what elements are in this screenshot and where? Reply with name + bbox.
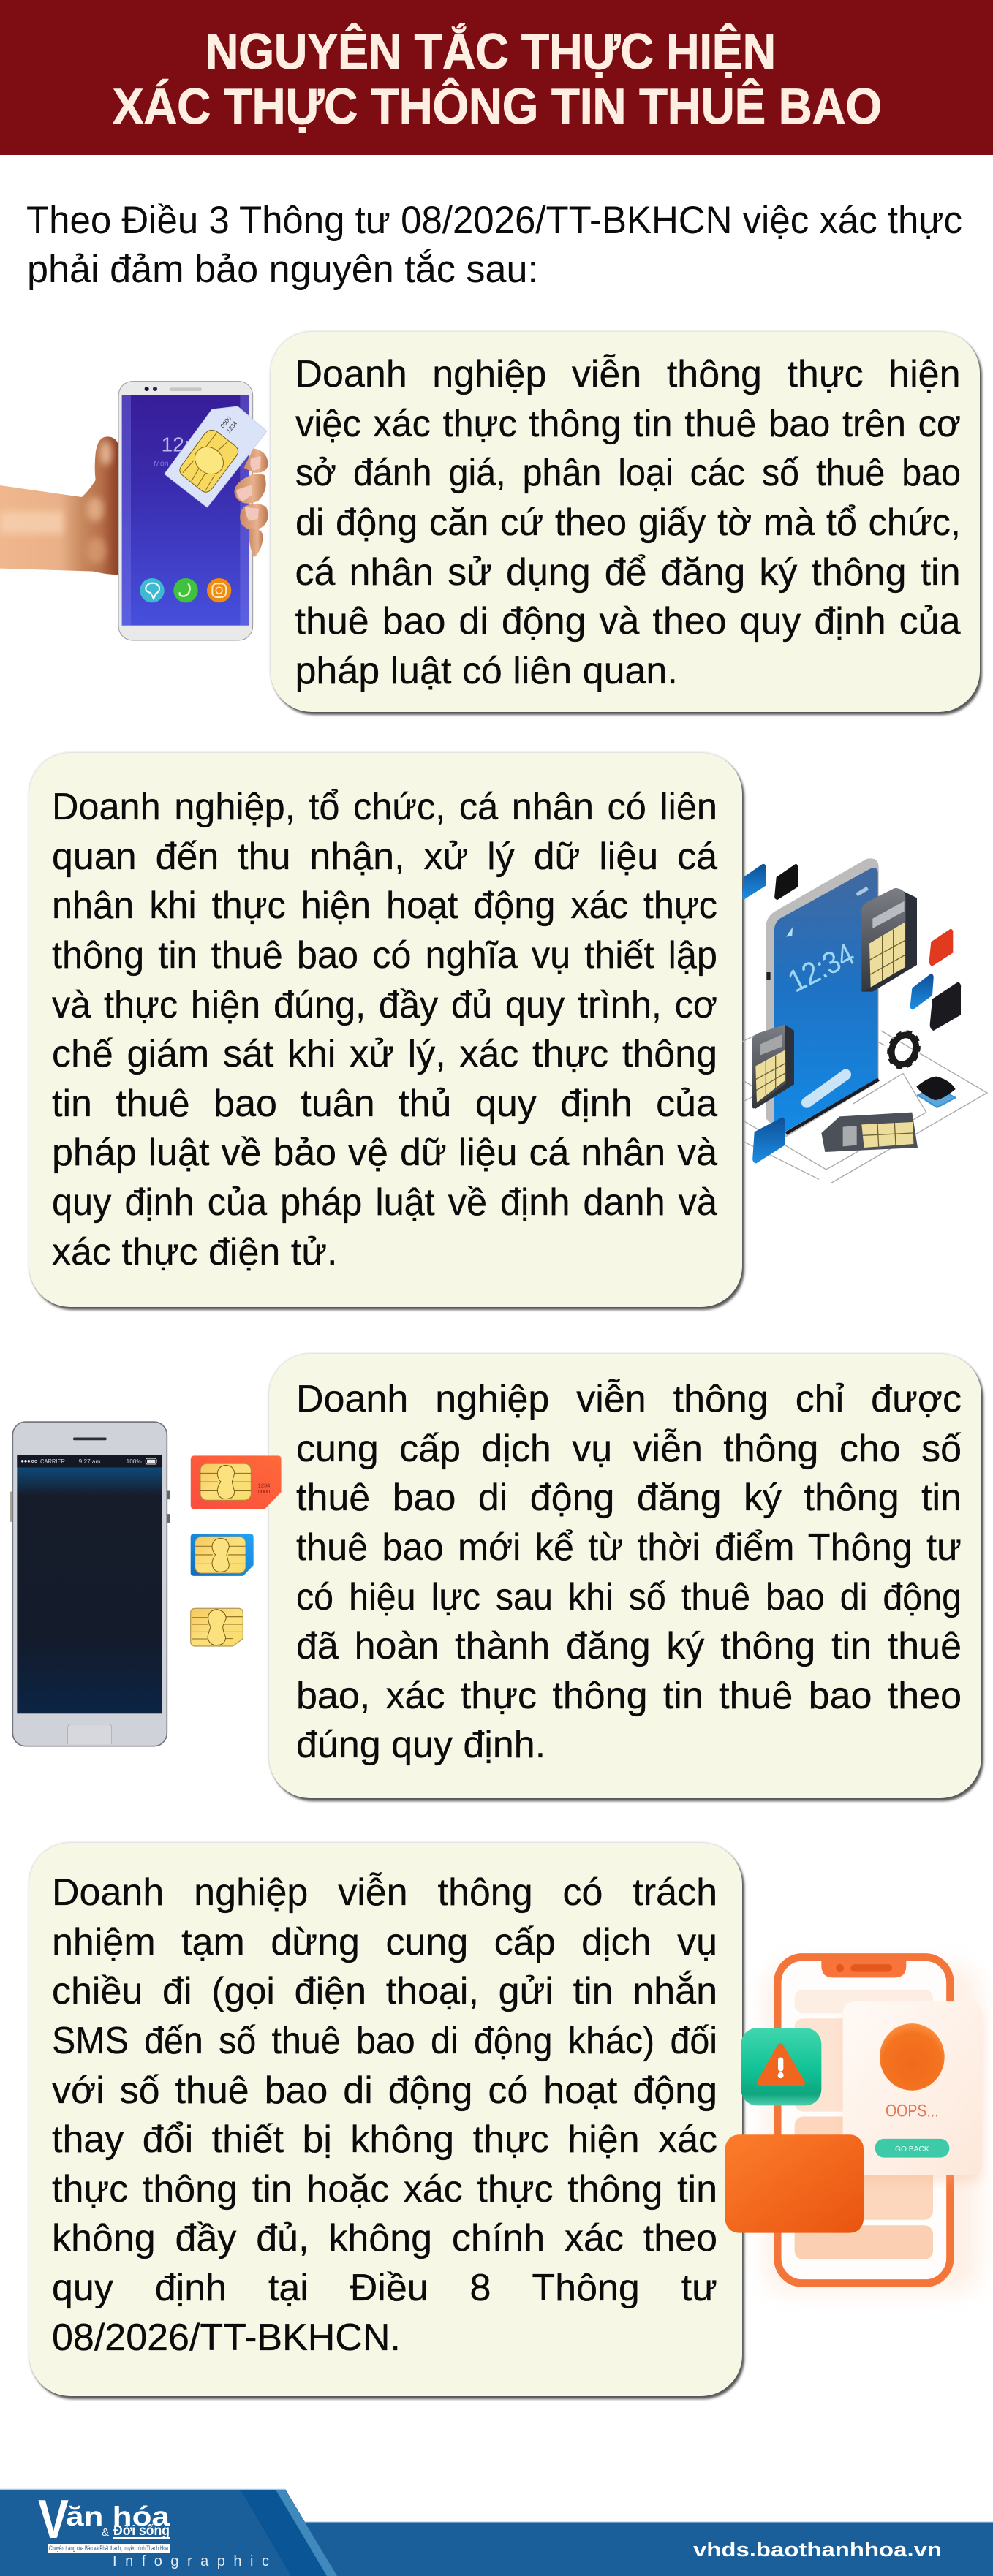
logo: V <box>38 2488 69 2550</box>
illustration: isometric phone with SIM cards <box>741 858 989 1183</box>
orange card <box>725 2134 864 2233</box>
text block 2: Doanh nghiệp, tổ chức, cá nhân có liên <box>52 786 717 828</box>
illustration: phone error screen <box>725 1953 989 2298</box>
fingers <box>234 448 268 558</box>
logo: Đời sống <box>113 2523 170 2539</box>
hand and arm <box>0 436 119 575</box>
title: NGUYÊN TẮC THỰC HIỆN <box>205 23 776 80</box>
panel: principle 3 <box>269 1354 981 1798</box>
phone <box>10 1422 170 1746</box>
text block 2: chế giám sát khi xử lý, xác thực thông <box>52 1033 717 1075</box>
panel: principle 1 <box>271 332 980 712</box>
text block 2: nhân khi thực hiện hoạt động xác thực <box>52 884 717 927</box>
phone <box>766 858 879 1138</box>
SIM card: 0000 <box>219 414 233 429</box>
text block 4: 08/2026/TT-BKHCN. <box>52 2316 401 2359</box>
text block 3 <box>296 1378 962 1766</box>
text block 4: thay đổi thiết bị không thực hiện xác <box>52 2118 717 2161</box>
phone: 100% <box>127 1458 142 1465</box>
title <box>113 23 882 135</box>
phone: CARRIER <box>40 1458 65 1465</box>
error card: OOPS... <box>886 2102 939 2121</box>
phone: 12:34 <box>782 936 861 999</box>
text block 4: thực thông tin hoặc xác thực thông tin <box>52 2168 717 2211</box>
error card <box>843 2001 982 2182</box>
text block 3: đã hoàn thành đăng ký thông tin thuê <box>296 1625 962 1667</box>
text block 2: pháp luật về bảo vệ dữ liệu cá nhân và <box>52 1132 717 1174</box>
text block 3: có hiệu lực sau khi số thuê bao di động <box>296 1576 962 1618</box>
text block 1: sở đánh giá, phân loại các số thuê bao <box>295 452 961 494</box>
text block 4: quy định tại Điều 8 Thông tư <box>52 2267 717 2309</box>
intro text <box>26 199 962 291</box>
text block 2 <box>52 786 718 1273</box>
logo: ăn hóa <box>66 2501 170 2531</box>
title: XÁC THỰC THÔNG TIN THUÊ BAO <box>113 78 882 135</box>
soft glow <box>766 1966 980 2293</box>
text block 1: thuê bao di động và theo quy định của <box>295 600 961 643</box>
flat SIM <box>821 1113 918 1152</box>
SIM: standard red: 0000 <box>258 1488 270 1495</box>
phone: 9:27 am <box>79 1458 100 1465</box>
text block 1: Doanh nghiệp viễn thông thực hiện <box>295 353 961 395</box>
text block 4: không đầy đủ, không chính xác theo <box>52 2217 717 2259</box>
text block 1: pháp luật có liên quan. <box>295 650 678 692</box>
intro text: Theo Điều 3 Thông tư 08/2026/TT-BKHCN việc xác thực <box>26 199 962 242</box>
text block 4: nhiệm tạm dừng cung cấp dịch vụ <box>52 1921 717 1963</box>
SIM card <box>165 406 267 507</box>
phone: 12: <box>162 433 190 455</box>
SIM: standard red: 1234 <box>258 1482 270 1489</box>
SIM: nano gold <box>191 1608 243 1646</box>
text block 2: xác thực điện tử. <box>52 1231 337 1273</box>
error card: GO BACK <box>895 2145 929 2153</box>
text block 4: chiều đi (gọi điện thoại, gửi tin nhắn <box>52 1970 717 2012</box>
text block 3: thuê bao mới kể từ thời điểm Thông tư <box>296 1526 962 1569</box>
large SIM <box>861 888 917 992</box>
text block 1: cá nhân sử dụng để đăng ký thông tin <box>295 551 961 594</box>
floor grid <box>742 1031 987 1183</box>
intro text: phải đảm bảo nguyên tắc sau: <box>27 248 538 291</box>
text block 3: đúng quy định. <box>296 1724 545 1766</box>
SIM: standard red <box>191 1455 282 1509</box>
warning icon <box>741 2028 821 2105</box>
logo <box>38 2488 170 2553</box>
small SIM <box>752 1025 794 1109</box>
text block 3: Doanh nghiệp viễn thông chỉ được <box>296 1378 962 1420</box>
text block 3: bao, xác thực thông tin thuê bao theo <box>296 1675 962 1717</box>
floating blocks <box>742 864 961 1164</box>
website: vhds.baothanhhoa.vn <box>693 2539 942 2561</box>
gear <box>884 1028 924 1072</box>
illustration: hand holding phone and SIM card <box>0 381 268 640</box>
phone frame <box>777 1958 950 2283</box>
footer <box>0 2488 993 2576</box>
chip block <box>916 1077 956 1107</box>
phone <box>118 382 253 640</box>
text block 1 <box>295 353 961 692</box>
panel: principle 4 <box>29 1843 742 2396</box>
text block 2: tin thuê bao tuân thủ quy định của <box>52 1083 717 1125</box>
SIM: micro blue <box>191 1534 254 1576</box>
phone: Mon <box>154 459 169 468</box>
text block 4: SMS đến số thuê bao di động khác) đối <box>52 2020 717 2062</box>
text block 3: thuê bao di động đăng ký thông tin <box>296 1477 962 1519</box>
text block 4: với số thuê bao di động có hoạt động <box>52 2069 717 2112</box>
footer band <box>0 2489 993 2576</box>
text block 2: quy định của pháp luật về định danh và <box>52 1181 717 1224</box>
text block 2: thông tin thuê bao có nghĩa vụ thiết lập <box>52 934 717 977</box>
SIM card: 1234 <box>225 420 239 434</box>
logo: Chuyên trang của Báo và Phát thanh, truyền hình Thanh Hóa <box>49 2545 168 2553</box>
logo: & <box>102 2526 109 2539</box>
header banner with title <box>0 0 993 155</box>
text block 1: việc xác thực thông tin thuê bao trên cơ <box>295 403 960 445</box>
text block 4: Doanh nghiệp viễn thông có trách <box>52 1871 717 1914</box>
text block 2: quan đến thu nhận, xử lý dữ liệu cá <box>52 836 717 878</box>
text block 3: cung cấp dịch vụ viễn thông cho số <box>296 1428 962 1470</box>
panel: principle 2 <box>29 753 742 1307</box>
infographic label: Infographic <box>113 2553 269 2569</box>
text block 1: di động căn cứ theo giấy tờ mà tổ chức, <box>295 501 960 544</box>
text block 4 <box>52 1871 717 2359</box>
illustration: smartphone and three SIM sizes <box>10 1421 282 1747</box>
text block 2: và thực hiện đúng, đầy đủ quy trình, cơ <box>52 984 717 1026</box>
